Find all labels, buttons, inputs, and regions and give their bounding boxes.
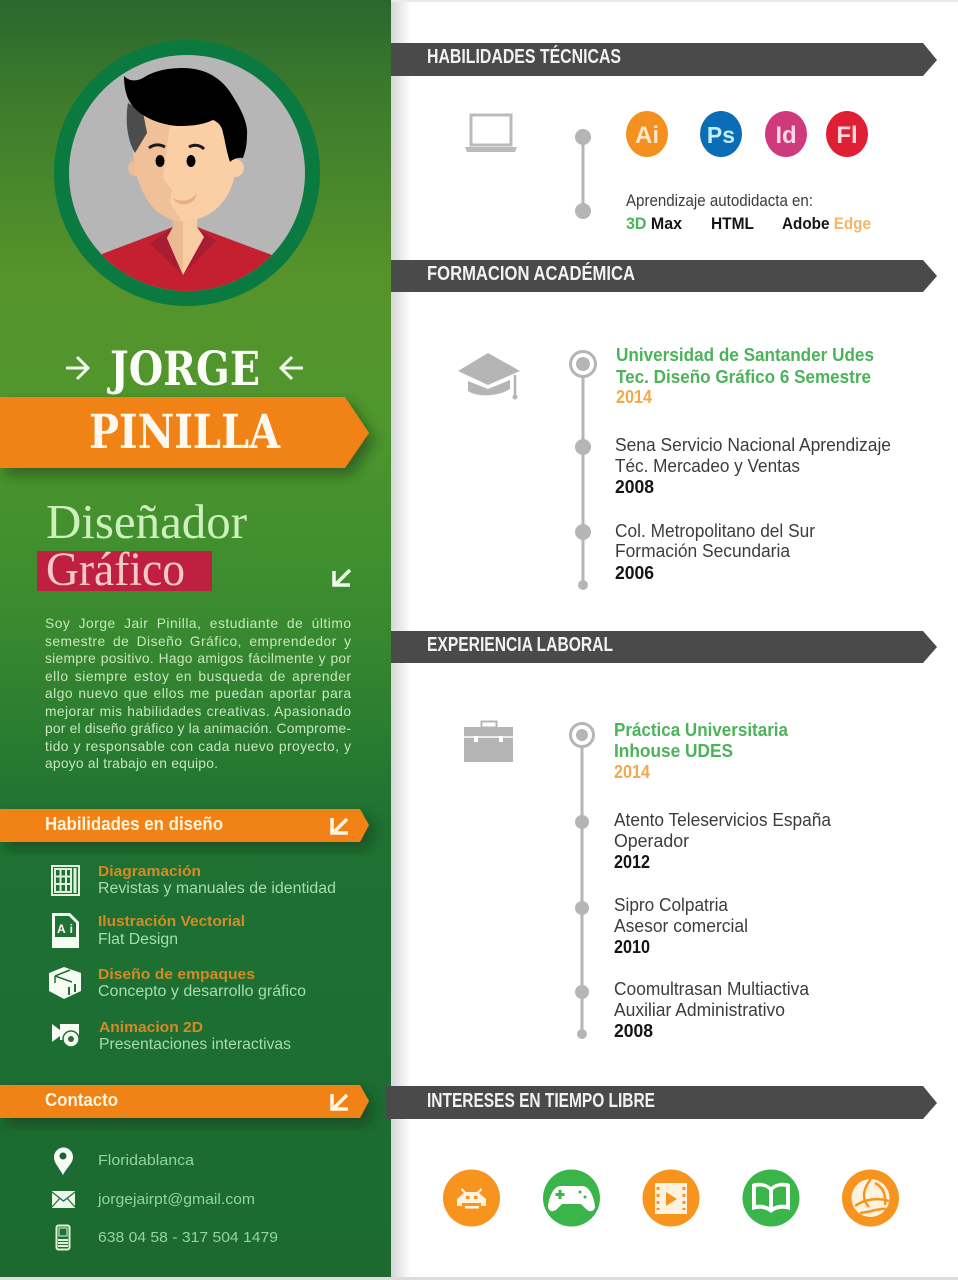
- entry: Sipro Colpatria: 2010: [614, 937, 650, 957]
- entry: Sena: [615, 435, 891, 497]
- section header: technical skills: [391, 43, 937, 76]
- section header: experience: EXPERIENCIA LABORAL: [427, 634, 613, 656]
- banner: design skills: Habilidades en diseño: [45, 814, 223, 834]
- badge: Photoshop: [700, 111, 742, 157]
- entry: Práctica Universitaria: Práctica Universitaria: [614, 720, 789, 740]
- entry: Colegio Metropolitano: 2006: [615, 563, 654, 583]
- icon: graduation cap: [458, 353, 520, 400]
- entry: Atento: Atento Teleservicios España: [614, 810, 832, 830]
- entry: Práctica Universitaria: 2014: [614, 762, 650, 782]
- entry: Universidad de Santander: Tec. Diseño Gráfico 6 Semestre: [616, 367, 871, 387]
- skill: layout: [52, 863, 336, 897]
- profile text: apoyo al trabajo en equipo.: [45, 756, 218, 771]
- banner: surname: [0, 397, 369, 468]
- banner: design skills: [0, 809, 369, 842]
- badge: Illustrator: [626, 111, 668, 157]
- skill: layout: Revistas y manuales de identidad: [98, 880, 336, 897]
- arrow icon: [334, 570, 350, 585]
- section header: interests: INTERESES EN TIEMPO LIBRE: [427, 1090, 655, 1112]
- entry: Coomultrasan: 2008: [614, 1021, 653, 1041]
- badge: Illustrator: Ai: [635, 122, 659, 149]
- entry: Colegio Metropolitano: Formación Secundaria: [615, 541, 791, 561]
- profile text: semestre de Diseño Gráfico, emprendedor y: [45, 634, 351, 649]
- profile text: siempre positivo. Hago amigos fácilmente y por: [45, 651, 351, 666]
- entry: Coomultrasan: Auxiliar Administrativo: [614, 1000, 785, 1020]
- skill: 2D animation: [52, 1019, 291, 1053]
- entry: Sipro Colpatria: Asesor comercial: [614, 916, 748, 936]
- self-taught text: Aprendizaje autodidacta en:: [626, 191, 813, 210]
- banner: surname: PINILLA: [89, 405, 280, 460]
- self-taught text: 3D Max: [626, 214, 683, 233]
- timeline: experience: [570, 724, 594, 1039]
- entry: Práctica Universitaria: Inhouse UDES: [614, 741, 733, 761]
- skill: 2D animation: Animacion 2D: [99, 1019, 203, 1036]
- contact: phone: 638 04 58 - 317 504 1479: [98, 1229, 278, 1246]
- section header: experience: [391, 631, 937, 663]
- entry: Coomultrasan: Coomultrasan Multiactiva: [614, 979, 810, 999]
- entry: Sena: 2008: [615, 477, 654, 497]
- banner: contact: Contacto: [45, 1090, 118, 1110]
- decorative arrow right: [66, 357, 88, 379]
- contact: phone: [56, 1226, 278, 1250]
- skill: 2D animation: Presentaciones interactivas: [99, 1036, 291, 1053]
- profile text: [45, 616, 351, 771]
- skill: packaging: Diseño de empaques: [98, 966, 255, 983]
- badge: InDesign: [765, 111, 807, 157]
- avatar portrait: [54, 40, 320, 306]
- profile text: tido y responsable con cada nuevo proyecto, y: [45, 739, 351, 754]
- self-taught text: HTML: [711, 214, 754, 233]
- entry: Universidad de Santander: 2014: [616, 387, 652, 407]
- section header: education: [391, 260, 937, 292]
- badge: Flash: [826, 111, 868, 157]
- contact: email: jorgejairpt@gmail.com: [97, 1191, 255, 1208]
- skill: packaging: Concepto y desarrollo gráfico: [98, 983, 306, 1000]
- name: Jorge: JORGE: [107, 342, 260, 397]
- entry: Atento: 2012: [614, 852, 650, 872]
- profile text: algo nuevo que ellos me puedan aportar para: [45, 686, 351, 701]
- contact: location: [54, 1148, 195, 1175]
- timeline: technical skills: [575, 129, 591, 219]
- banner: contact: [0, 1085, 369, 1118]
- icon: open book: [742, 1170, 800, 1226]
- icon: film: [642, 1170, 700, 1226]
- profile text: por el diseño gráfico y la animación. Comprome-: [45, 721, 351, 736]
- section header: interests: [385, 1086, 937, 1119]
- badge: InDesign: Id: [775, 122, 797, 149]
- section header: technical skills: HABILIDADES TÉCNICAS: [427, 45, 621, 68]
- icon: laptop: [465, 115, 517, 152]
- self-taught text: [626, 191, 871, 233]
- entry: Sena: Sena Servicio Nacional Aprendizaje: [615, 435, 891, 455]
- job title: Gráfico: [46, 543, 185, 596]
- entry: Sipro Colpatria: [614, 895, 748, 957]
- badge: Flash: Fl: [836, 122, 858, 149]
- entry: Coomultrasan: [614, 979, 810, 1041]
- icon: game controller: [543, 1170, 600, 1226]
- self-taught text: Adobe Edge: [782, 214, 871, 233]
- decorative arrow left: [281, 357, 303, 379]
- skill: vector illustration: Ilustración Vectorial: [98, 913, 245, 930]
- timeline: education: [570, 352, 596, 590]
- entry: Sipro Colpatria: Sipro Colpatria: [614, 895, 729, 915]
- icon: briefcase: [464, 722, 513, 762]
- entry: Universidad de Santander: Universidad de Santander Udes: [616, 345, 874, 365]
- profile text: ello siempre estoy en busqueda de aprender: [45, 669, 351, 684]
- entry: Sena: Téc. Mercadeo y Ventas: [615, 456, 800, 476]
- entry: Práctica Universitaria: [614, 720, 789, 782]
- skill: vector illustration: [52, 913, 245, 948]
- skill: layout: Diagramación: [98, 863, 201, 880]
- skill: vector illustration: Flat Design: [98, 931, 178, 948]
- profile text: mejorar mis habilidades creativas. Apasionado: [45, 704, 351, 719]
- skill: packaging: [49, 966, 306, 1000]
- section header: education: FORMACION ACADÉMICA: [427, 262, 635, 285]
- entry: Atento: [614, 810, 832, 872]
- entry: Atento: Operador: [614, 831, 689, 851]
- panel: left sidebar: [0, 0, 391, 1277]
- job title: [37, 494, 247, 596]
- entry: Colegio Metropolitano: Col. Metropolitano del Sur: [615, 521, 815, 541]
- icon: space invader: [443, 1170, 500, 1226]
- profile text: Soy Jorge Jair Pinilla, estudiante de último: [45, 616, 351, 631]
- badge: Photoshop: Ps: [707, 122, 735, 148]
- entry: Colegio Metropolitano: [615, 521, 815, 583]
- entry: Universidad de Santander: [616, 345, 874, 407]
- contact: location: Floridablanca: [98, 1152, 195, 1169]
- skill: vector illustration: Ai: [57, 922, 73, 936]
- job title: Diseñador: [46, 494, 247, 549]
- icon: volleyball: [842, 1170, 899, 1226]
